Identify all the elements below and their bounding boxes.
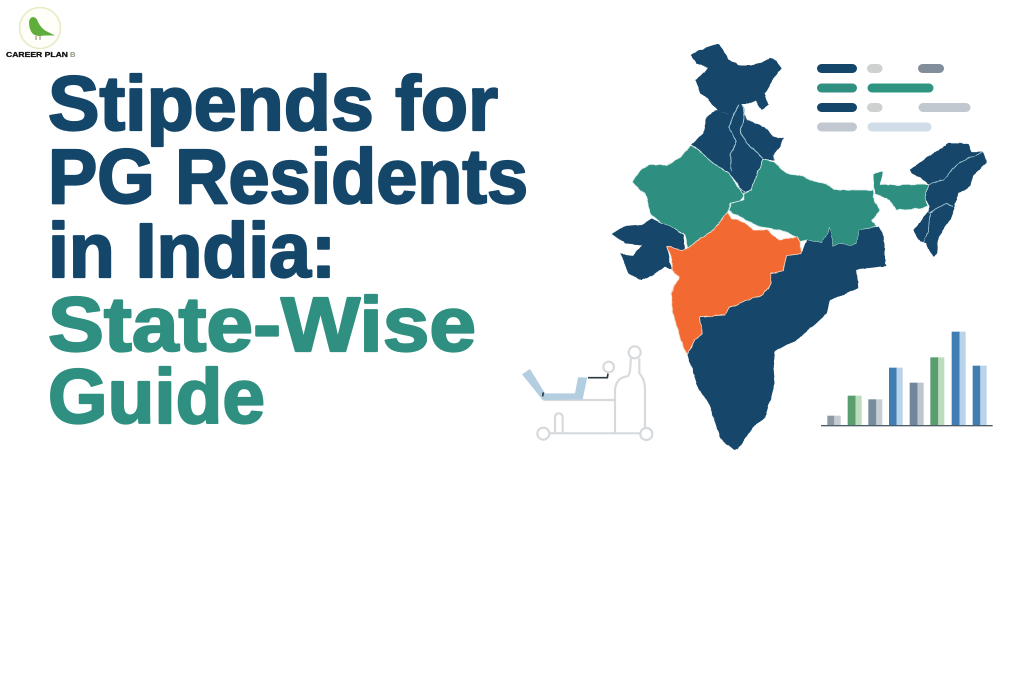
region: central teal [729, 159, 880, 247]
region: Assam teal [873, 172, 928, 210]
title line: PG Residents: PG Residents [48, 134, 528, 220]
map of India [612, 44, 987, 450]
logo text: CAREER PLAN [6, 50, 68, 59]
region: Gujarat [612, 218, 685, 281]
title line: Guide: Guide [48, 354, 265, 440]
icon: medical bed line drawing [522, 346, 652, 440]
legend bars [817, 64, 970, 132]
title line: in India:: in India: [48, 208, 336, 294]
region: orange central [667, 212, 802, 355]
title line: State-Wise: State-Wise [48, 282, 476, 368]
region: far north [691, 44, 782, 114]
bar chart [821, 332, 993, 426]
region: south [687, 227, 887, 450]
region: northeast [910, 143, 987, 257]
title [48, 61, 528, 440]
icon: green bird [29, 17, 55, 40]
title line: Stipends for: Stipends for [48, 61, 498, 147]
region: north central [692, 104, 783, 193]
logo: Career Plan B: B [70, 50, 76, 59]
region: west teal [632, 145, 743, 248]
logo: Career Plan B [6, 8, 76, 59]
